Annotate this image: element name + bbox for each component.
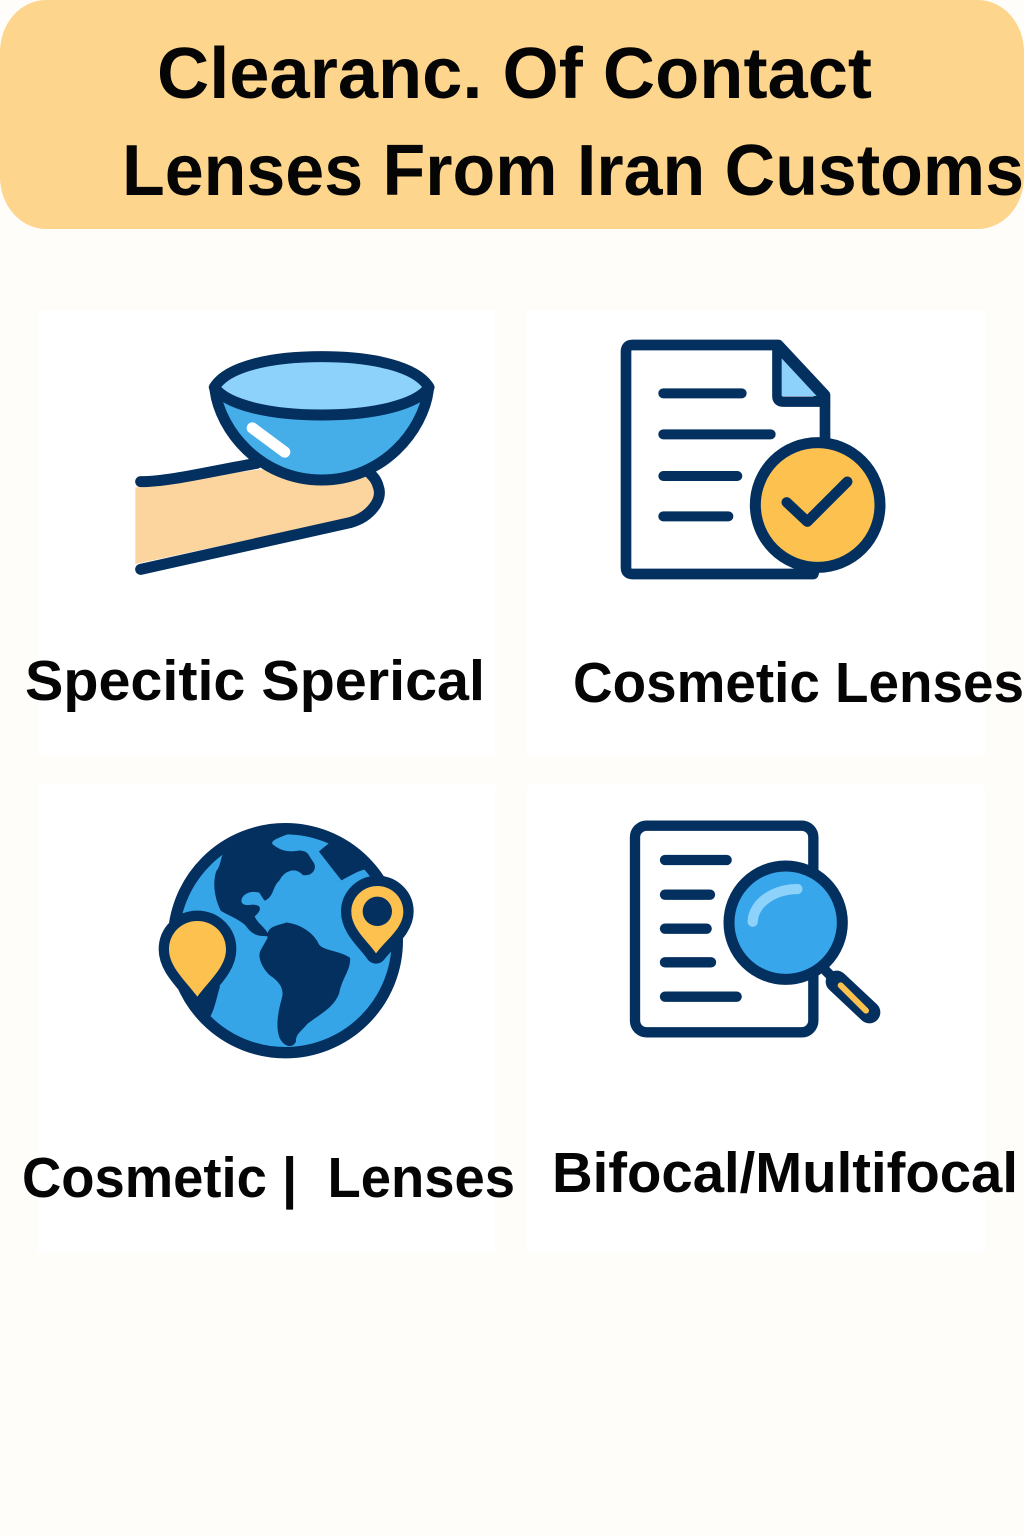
title: Clearanc. Of Contact — [157, 34, 872, 114]
panel: specific spherical — [25, 310, 495, 755]
label: Bifocal/Multifocal: Bifocal/Multifocal — [552, 1141, 1018, 1205]
panel: cosmetic lenses bottom — [22, 785, 515, 1253]
title — [122, 34, 1024, 211]
label: Cosmetic | Lenses: Cosmetic | Lenses — [22, 1146, 515, 1210]
panel: cosmetic lenses top — [527, 310, 1024, 755]
icon: document with magnifying glass — [635, 826, 869, 1032]
icon: globe with map pins — [169, 828, 403, 1053]
icon: contact lens on fingertip — [135, 357, 429, 569]
title: Lenses From Iran Customs — [122, 131, 1024, 211]
icon: document with check mark — [626, 345, 880, 574]
label: Specitic Sperical: Specitic Sperical — [25, 649, 485, 713]
panel: bifocal multifocal — [527, 785, 1018, 1253]
header banner — [0, 0, 1024, 229]
